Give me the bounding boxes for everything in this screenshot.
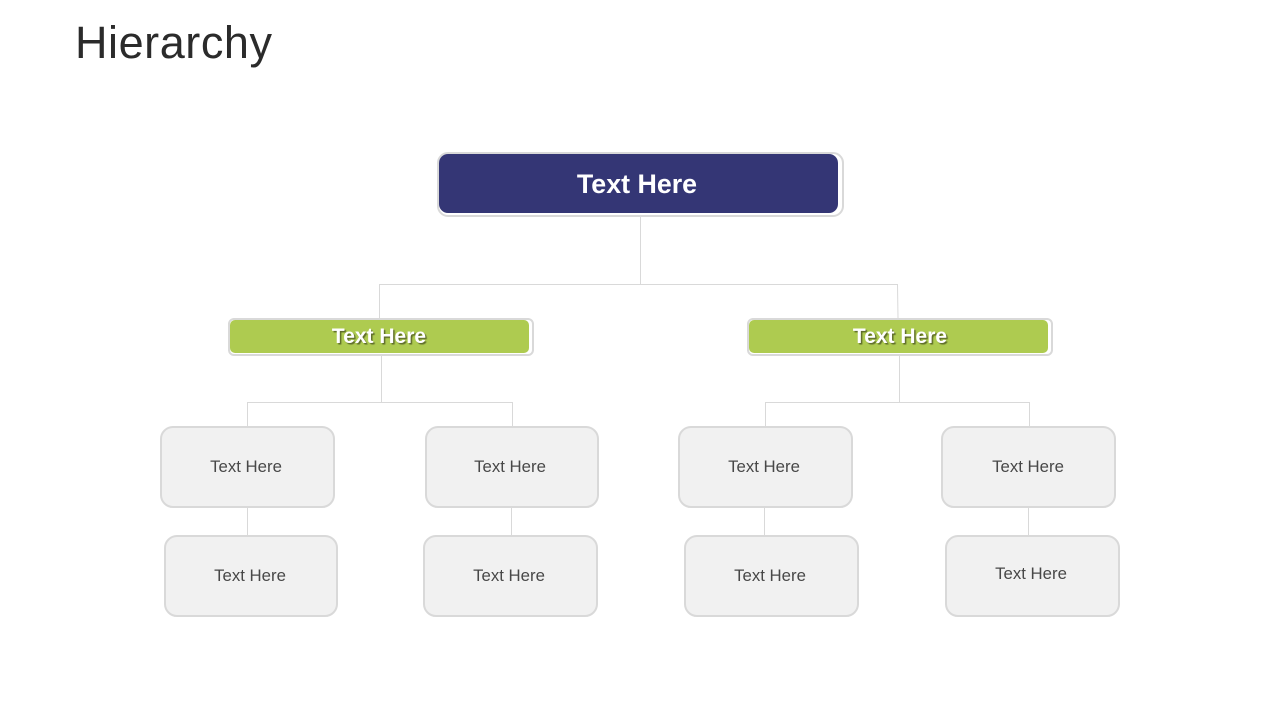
leaf node: row 1 column 2	[425, 426, 599, 508]
leaf node: row 2 column 2	[423, 535, 598, 617]
root node fill	[439, 154, 838, 213]
leaf node: row 2 column 3	[684, 535, 859, 617]
leaf node: row 2 column 4	[945, 535, 1120, 617]
right node fill	[749, 320, 1048, 353]
leaf node: row 2 column 3: Text Here	[734, 566, 806, 585]
leaf node: row 2 column 4: Text Here	[995, 564, 1067, 583]
leaf node: row 1 column 1: Text Here	[210, 457, 282, 476]
right node label: Text Here	[853, 325, 947, 348]
leaf node: row 1 column 4: Text Here	[992, 457, 1064, 476]
leaf node: row 2 column 2: Text Here	[473, 566, 545, 585]
root node label: Text Here	[577, 169, 697, 199]
title: Hierarchy	[75, 17, 272, 68]
leaf node: row 1 column 3	[678, 426, 853, 508]
leaf node: row 2 column 1: Text Here	[214, 566, 286, 585]
leaf node: row 1 column 3: Text Here	[728, 457, 800, 476]
left node label: Text Here	[332, 325, 426, 348]
leaf node: row 2 column 1	[164, 535, 338, 617]
root node	[437, 152, 844, 217]
left node fill	[230, 320, 529, 353]
leaf node: row 1 column 1	[160, 426, 335, 508]
level 2 node: left	[228, 318, 534, 356]
leaf node: row 1 column 2: Text Here	[474, 457, 546, 476]
leaf node: row 1 column 4	[941, 426, 1116, 508]
level 2 node: right	[747, 318, 1053, 356]
